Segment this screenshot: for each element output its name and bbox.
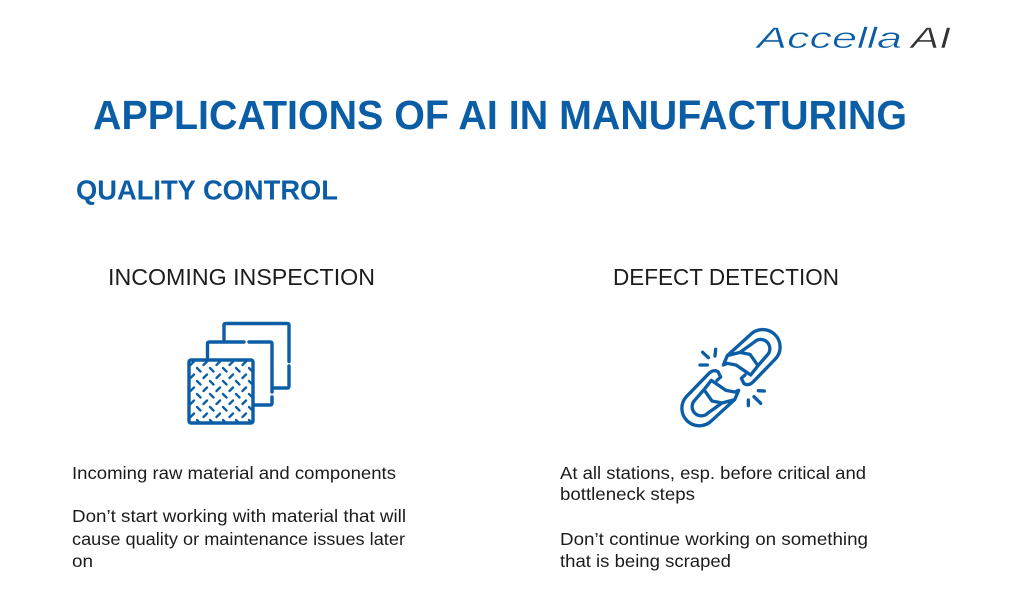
section heading: quality control: QUALITY CONTROL [76,174,338,206]
icon: stacked material sheets [189,324,289,423]
text: defect description: that is being scraped [560,551,731,571]
heading: defect detection: DEFECT DETECTION [613,264,839,290]
logo: Accella AI: Accella [754,22,902,55]
text: incoming description: on [72,551,93,571]
logo: Accella AI: AI [908,22,951,55]
text: defect description: Don’t continue working on something [560,529,868,549]
logo: Accella AI [754,22,951,55]
text: incoming description [72,463,406,571]
title: APPLICATIONS OF AI IN MANUFACTURING [93,92,907,138]
text: defect description: At all stations, esp. before critical and [560,463,866,483]
text: defect description [560,463,868,571]
heading: incoming inspection: INCOMING INSPECTION [108,264,375,290]
icon: broken chain link [682,330,780,426]
text: defect description: bottleneck steps [560,484,695,504]
column: defect detection [560,264,868,571]
text: incoming description: Don’t start working with material that will [72,506,406,526]
text: incoming description: Incoming raw material and components [72,463,396,483]
text: incoming description: cause quality or maintenance issues later [72,529,405,549]
column: incoming inspection [72,264,406,571]
